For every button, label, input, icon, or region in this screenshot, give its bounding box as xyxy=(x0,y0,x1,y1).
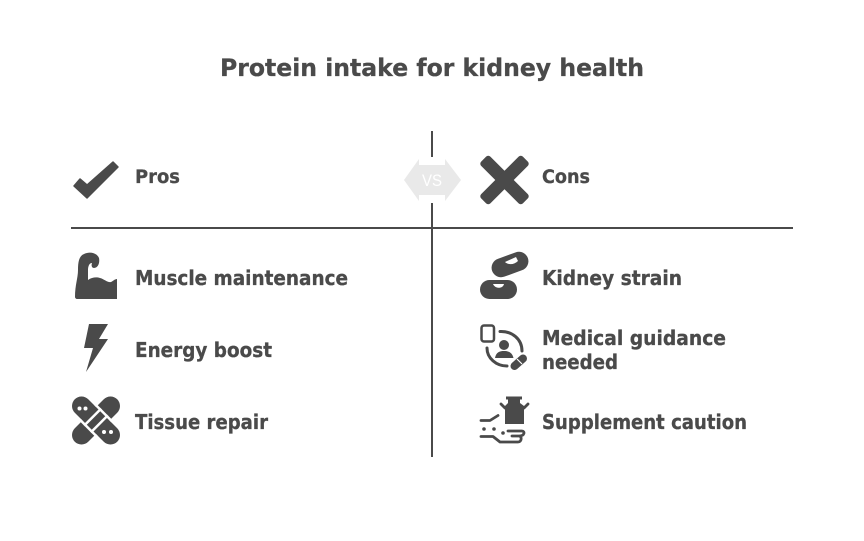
label: medical guidance needed: needed xyxy=(542,350,618,374)
icon: medical guidance xyxy=(482,326,523,366)
icon: flexed muscle xyxy=(75,253,117,299)
pros heading: Pros xyxy=(135,166,180,188)
icon: cross xyxy=(479,155,530,205)
title: Protein intake for kidney health xyxy=(220,54,644,82)
label: medical guidance needed: Medical guidance xyxy=(542,326,726,350)
label: supplement caution: Supplement caution xyxy=(542,410,747,434)
VS badge: VS xyxy=(422,171,442,190)
icon: check mark xyxy=(74,162,118,198)
label: energy boost: Energy boost xyxy=(135,338,272,362)
vertical divider xyxy=(431,131,433,457)
VS badge xyxy=(404,159,461,201)
icon: crossed bandages xyxy=(54,378,138,463)
label: kidney strain: Kidney strain xyxy=(542,266,682,290)
label: medical guidance needed xyxy=(542,326,726,374)
label: tissue repair: Tissue repair xyxy=(135,410,268,434)
label: muscle maintenance: Muscle maintenance xyxy=(135,266,348,290)
horizontal divider xyxy=(71,227,793,229)
icon: supplement bottle in hand xyxy=(481,396,528,442)
cons heading: Cons xyxy=(542,166,590,188)
icon: lightning bolt xyxy=(84,324,108,372)
icon: kidney beans xyxy=(480,249,531,299)
